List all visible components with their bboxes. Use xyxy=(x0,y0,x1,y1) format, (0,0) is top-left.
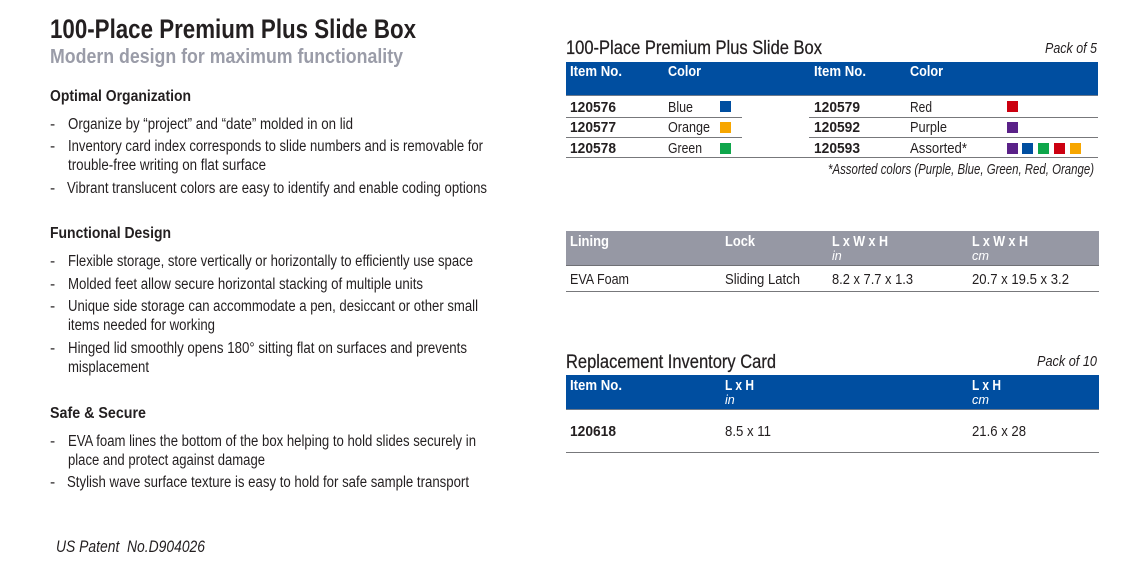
pack size: Pack of 10 xyxy=(1037,353,1098,370)
row 120579 red: Red xyxy=(910,99,932,116)
heading: functional design: Functional Design xyxy=(50,225,171,242)
table header xyxy=(566,375,1099,410)
text block: safe and secure xyxy=(50,405,476,491)
bullet list: optimal organization: Organize by “project” and “date” molded in on lid xyxy=(68,116,353,133)
table header: Lining xyxy=(570,234,609,250)
bullet list: functional design: misplacement xyxy=(68,359,150,376)
bullet list: functional design: - xyxy=(50,340,55,357)
row 120577 orange xyxy=(570,119,731,136)
table header: in xyxy=(725,393,735,407)
table header: Item No. xyxy=(570,378,622,394)
table row: 8.2 x 7.7 x 1.3 xyxy=(832,271,913,288)
row 120578 green: 120578 xyxy=(570,141,616,157)
row 120576 blue xyxy=(570,99,731,116)
table header: Lock xyxy=(725,234,756,250)
panel: slide box color table xyxy=(566,38,1098,178)
table row: 120618 xyxy=(570,424,616,440)
row 120593 assorted xyxy=(814,140,1081,157)
table header xyxy=(566,231,1099,266)
text block: optimal organization xyxy=(50,88,487,197)
table row: 20.7 x 19.5 x 3.2 xyxy=(972,271,1069,288)
table row: EVA Foam xyxy=(570,271,629,288)
table header: Item No. xyxy=(570,64,622,80)
bullet list: optimal organization: Inventory card index corresponds to slide numbers and is removable for xyxy=(68,138,483,155)
row 120576 blue: Blue xyxy=(668,99,693,116)
table row: 21.6 x 28 xyxy=(972,423,1026,440)
bullet list: safe and secure: - xyxy=(50,474,55,491)
bullet list: functional design: Molded feet allow secure horizontal stacking of multiple units xyxy=(68,276,423,293)
table header: Color xyxy=(668,64,701,80)
bullet list: optimal organization: - xyxy=(50,116,55,133)
title: 100-Place Premium Plus Slide Box xyxy=(50,14,416,44)
table heading: Replacement Inventory Card xyxy=(566,352,776,373)
bullet list: functional design: Hinged lid smoothly opens 180° sitting flat on surfaces and prevents xyxy=(68,340,467,357)
row 120577 orange: Orange xyxy=(668,119,710,136)
bullet list: safe and secure: EVA foam lines the bottom of the box helping to hold slides securely in xyxy=(68,433,476,450)
table header: Item No. xyxy=(814,64,866,80)
bullet list: safe and secure: place and protect against damage xyxy=(68,452,265,469)
table header: L x H xyxy=(972,378,1001,394)
pack size: Pack of 5 xyxy=(1045,40,1098,57)
table header: in xyxy=(832,249,842,263)
bullet list: functional design: - xyxy=(50,253,55,270)
panel: specifications table xyxy=(566,231,1099,292)
table row: 8.5 x 11 xyxy=(725,423,771,440)
row 120576 blue: 120576 xyxy=(570,100,616,116)
bullet list: functional design: items needed for working xyxy=(68,317,215,334)
row 120592 purple: 120592 xyxy=(814,120,860,136)
patent note: US Patent No.D904026 xyxy=(56,537,205,556)
bullet list: functional design xyxy=(50,253,478,376)
subtitle: Modern design for maximum functionality xyxy=(50,46,404,68)
table header: L x H xyxy=(725,378,754,394)
bullet list: functional design: - xyxy=(50,276,55,293)
bullet list: functional design: - xyxy=(50,298,55,315)
row 120592 purple: Purple xyxy=(910,119,947,136)
table header: cm xyxy=(972,393,989,407)
bullet list: optimal organization: Vibrant translucent colors are easy to identify and enable coding options xyxy=(67,180,487,197)
table header: L x W x H xyxy=(972,234,1028,250)
bullet list: safe and secure xyxy=(50,433,476,491)
heading: optimal organization: Optimal Organization xyxy=(50,88,191,105)
bullet list: functional design: Flexible storage, store vertically or horizontally to efficiently use space xyxy=(68,253,473,270)
row 120577 orange: 120577 xyxy=(570,120,616,136)
table header: L x W x H xyxy=(832,234,888,250)
table row: Sliding Latch xyxy=(725,271,800,288)
row 120593 assorted: Assorted* xyxy=(910,140,967,157)
table heading: 100-Place Premium Plus Slide Box xyxy=(566,38,822,59)
bullet list: optimal organization xyxy=(50,116,487,197)
bullet list: optimal organization: - xyxy=(50,138,55,155)
row 120579 red xyxy=(814,99,1018,116)
bullet list: optimal organization: trouble-free writing on flat surface xyxy=(68,157,266,174)
table row xyxy=(570,271,1069,288)
table row xyxy=(570,423,1026,440)
table header: cm xyxy=(972,249,989,263)
bullet list: functional design: Unique side storage can accommodate a pen, desiccant or other small xyxy=(68,298,478,315)
row 120578 green xyxy=(570,140,731,157)
panel: replacement inventory card table xyxy=(566,352,1099,453)
text block: functional design xyxy=(50,225,478,376)
row 120593 assorted: 120593 xyxy=(814,141,860,157)
table header: Color xyxy=(910,64,943,80)
row 120579 red: 120579 xyxy=(814,100,860,116)
row 120578 green: Green xyxy=(668,140,702,157)
row 120592 purple xyxy=(814,119,1018,136)
table header xyxy=(566,62,1098,96)
bullet list: optimal organization: - xyxy=(50,180,55,197)
heading: safe and secure: Safe & Secure xyxy=(50,405,146,422)
bullet list: safe and secure: Stylish wave surface texture is easy to hold for safe sample transport xyxy=(67,474,470,491)
bullet list: safe and secure: - xyxy=(50,433,55,450)
